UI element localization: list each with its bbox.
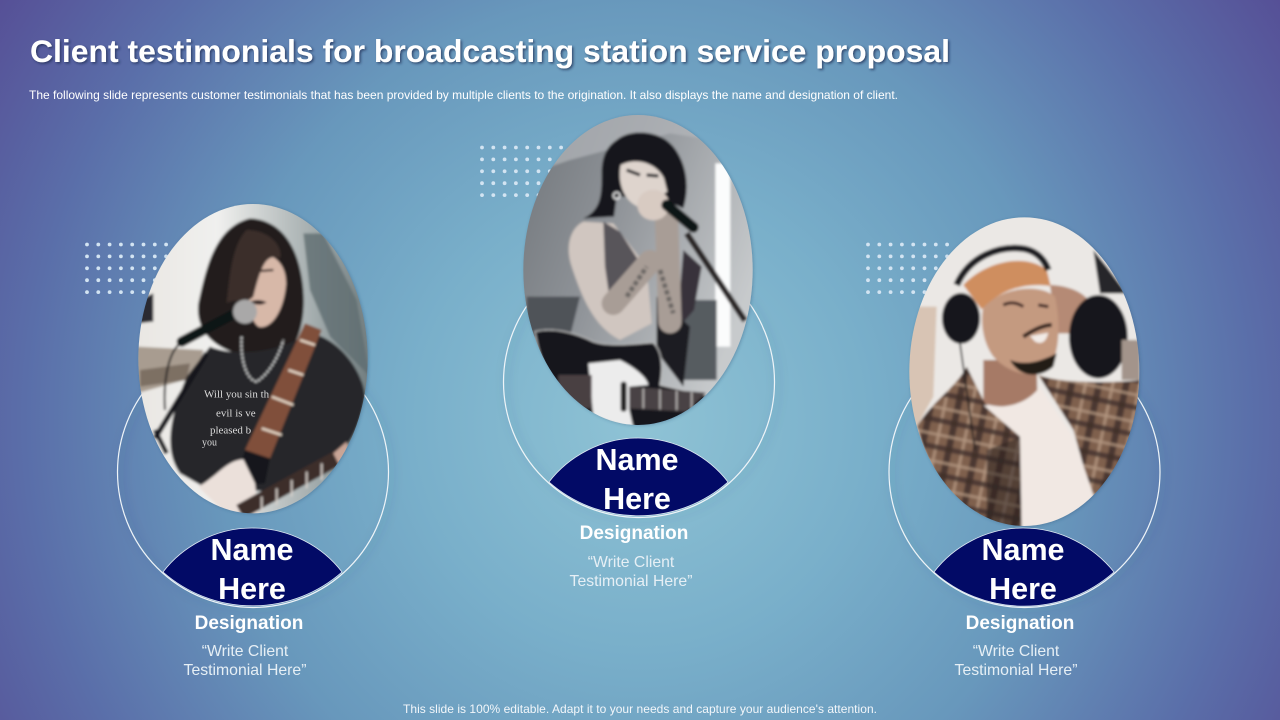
testimonial card: right [866, 213, 1160, 679]
subtitle: The following slide represents customer testimonials that has been provided by multiple clients to the origination. It also displays the name and designation of client. [29, 88, 898, 102]
photo: singer with guitar and microphone: Will you sin th [204, 388, 270, 400]
testimonial text: center: Testimonial Here” [570, 573, 692, 590]
dot pattern: right [866, 243, 949, 294]
testimonial card: left [85, 200, 388, 679]
name badge: right: Name [981, 533, 1065, 567]
name badge: left: Here [218, 572, 286, 606]
name badge: left: Name [210, 533, 294, 567]
title: Client testimonials for broadcasting station service proposal [30, 33, 950, 69]
testimonial text: center: “Write Client [588, 554, 675, 571]
testimonial card: center [480, 110, 774, 590]
photo: singer with guitar and microphone: evil is ve [216, 408, 256, 420]
designation: left: Designation [195, 613, 303, 634]
dot pattern: left [85, 243, 168, 294]
name badge: center: Name [595, 443, 679, 477]
name badge: right: Here [989, 572, 1057, 606]
dot pattern: center [480, 146, 563, 197]
testimonial text: left: “Write Client [202, 643, 289, 660]
ring: right [889, 336, 1160, 608]
photo: singer with guitar and microphone [133, 200, 373, 517]
name badge: right [934, 528, 1114, 606]
name badge: center [549, 438, 728, 516]
ring: left [118, 336, 388, 608]
photo: singer with guitar and microphone: you [202, 437, 217, 448]
name badge: center: Here [603, 482, 671, 516]
designation: center: Designation [580, 523, 688, 544]
footer note: This slide is 100% editable. Adapt it to your needs and capture your audience's attention. [403, 702, 877, 716]
name badge: left [163, 528, 342, 606]
testimonial text: right: Testimonial Here” [955, 662, 1077, 679]
ring: center [504, 246, 774, 518]
designation: right: Designation [966, 613, 1074, 634]
photo: man singing in headphones [907, 213, 1143, 530]
photo: singer with guitar and microphone: pleased b [210, 424, 252, 436]
testimonial text: right: “Write Client [973, 643, 1060, 660]
photo: tattooed singer with guitar [520, 110, 757, 430]
testimonial text: left: Testimonial Here” [184, 662, 306, 679]
